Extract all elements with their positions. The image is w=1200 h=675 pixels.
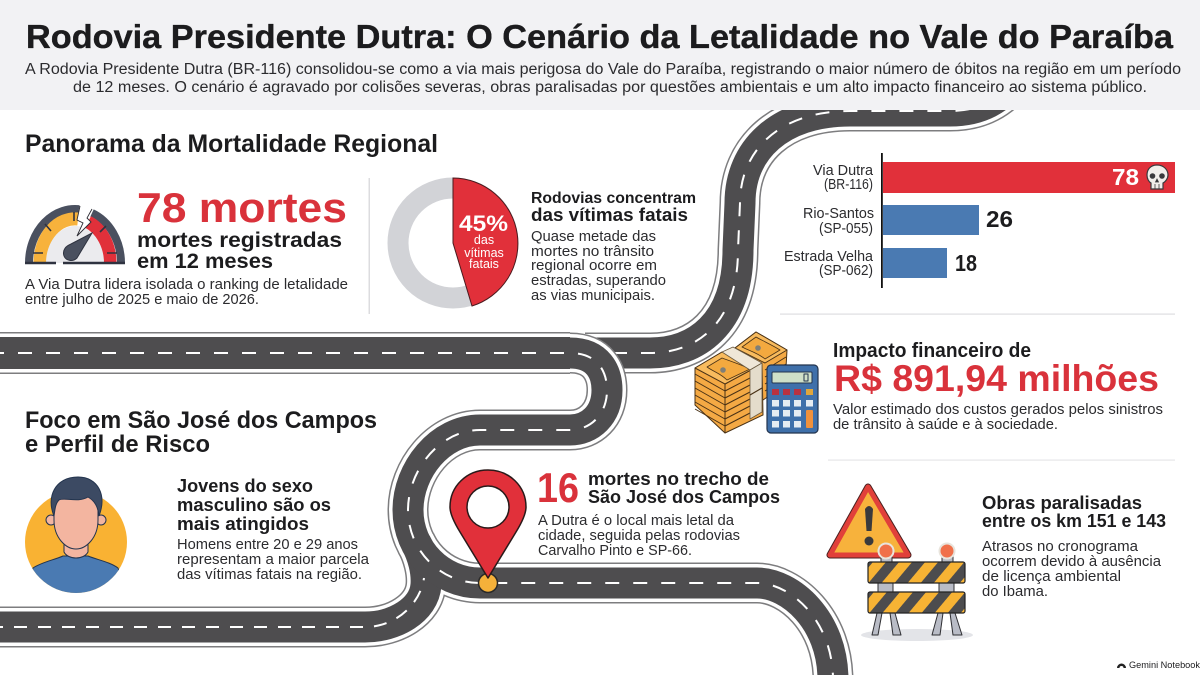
road network: [0, 75, 1020, 675]
text: roads concentrate victims: [531, 190, 696, 304]
description: cost: de trânsito à saúde e à sociedade.: [833, 416, 1058, 433]
panel: financial impact: [695, 332, 1163, 433]
text: roads concentrate victims: estradas, superando: [531, 272, 666, 289]
bar: Rio-Santos: 26: [986, 206, 1013, 232]
panel: regional mortality: [25, 130, 696, 314]
bar: Estrada Velha: Estrada Velha: [784, 249, 874, 265]
text: young men: Homens entre 20 e 29 anos: [177, 536, 358, 553]
description: stretch: [538, 512, 740, 559]
text: young men: Jovens do sexo: [177, 475, 313, 496]
title: Rodovia Presidente Dutra: O Cenário da Letalidade no Vale do Paraíba: [26, 18, 1174, 55]
text: roads concentrate victims: as vias municipais.: [531, 287, 655, 304]
heading: focus: [25, 407, 377, 458]
bar: Estrada Velha: (SP-062): [819, 263, 873, 279]
stat caption: [137, 228, 342, 273]
road: main winding route: [0, 353, 833, 675]
description: works: Atrasos no cronograma: [982, 538, 1139, 555]
stat caption: em 12 meses: [137, 249, 273, 273]
text: young men: representam a maior parcela: [177, 551, 370, 568]
heading: works: [982, 492, 1166, 531]
bar chart: deaths per highway: [784, 153, 1175, 288]
stat: 16 deaths: 16: [537, 464, 579, 511]
heading: panorama: Panorama da Mortalidade Regional: [25, 130, 438, 158]
donut chart: 45%: das: [474, 233, 494, 247]
subtitle: de 12 meses. O cenário é agravado por colisões severas, obras paralisadas por questões ambientais e um alto impacto financeiro ao sistema público.: [73, 79, 1147, 96]
stat caption: stretch: São José dos Campos: [588, 486, 780, 507]
donut chart: 45%: fatais: [469, 257, 499, 271]
text: roads concentrate victims: das vítimas fatais: [531, 204, 688, 225]
description: works: ocorrem devido à ausência: [982, 553, 1162, 570]
description: cost: [833, 401, 1163, 433]
stat: 78 deaths: 78 mortes: [137, 184, 347, 231]
stat caption: stretch: [588, 468, 780, 507]
bar: Estrada Velha: [784, 248, 977, 279]
description: works: de licença ambiental: [982, 568, 1121, 585]
description: stretch: cidade, seguida pelas rodovias: [538, 527, 740, 544]
icon: map pin: [450, 470, 526, 592]
heading: focus: Foco em São José dos Campos: [25, 407, 377, 434]
text: roads concentrate victims: mortes no trânsito: [531, 243, 654, 260]
road: upper right branch: [585, 75, 1020, 353]
text: young men: masculino são os: [177, 494, 331, 515]
icon: money stacks and calculator: [695, 332, 818, 433]
text: young men: [177, 475, 370, 583]
text: roads concentrate victims: regional ocorre em: [531, 257, 657, 274]
description: ranking: [25, 276, 348, 308]
subtitle: [25, 61, 1181, 96]
heading: works: entre os km 151 e 143: [982, 510, 1166, 531]
bar: Rio-Santos: Rio-Santos: [803, 206, 874, 222]
bar: Estrada Velha: 18: [955, 250, 977, 276]
text: roads concentrate victims: Rodovias concentram: [531, 190, 696, 207]
panel: São José dos Campos focus: [20, 407, 780, 600]
heading: focus: e Perfil de Risco: [25, 431, 210, 458]
text: young men: das vítimas fatais na região.: [177, 566, 362, 583]
icon: warning sign and barrier: [830, 487, 973, 641]
icon: broken speedometer: [25, 203, 125, 263]
description: works: [982, 538, 1162, 600]
donut chart: 45%: 45%: [459, 211, 508, 236]
bar: Via Dutra: Via Dutra: [813, 163, 874, 179]
subtitle: A Rodovia Presidente Dutra (BR-116) consolidou-se como a via mais perigosa do Vale do Paraíba, registrando o maior número de óbitos na região em um período: [25, 61, 1181, 78]
description: ranking: entre julho de 2025 e maio de 2026.: [25, 291, 259, 308]
panel: stalled works: [830, 487, 1166, 641]
description: cost: Valor estimado dos custos gerados pelos sinistros: [833, 401, 1163, 418]
bar: Via Dutra: 78: [1112, 164, 1139, 190]
bar: Via Dutra: [813, 162, 1175, 193]
bar: Via Dutra: (BR-116): [824, 177, 873, 193]
bar: Rio-Santos: (SP-055): [819, 221, 873, 237]
header band: [0, 0, 1200, 110]
donut chart: 45%: vítimas: [464, 246, 504, 260]
description: stretch: A Dutra é o local mais letal da: [538, 512, 735, 529]
stat caption: mortes registradas: [137, 228, 342, 252]
icon: young man avatar: [25, 476, 127, 593]
stat: R$ 891,94 million: R$ 891,94 milhões: [834, 358, 1159, 399]
text: roads concentrate victims: Quase metade das: [531, 228, 656, 245]
description: stretch: Carvalho Pinto e SP-66.: [538, 542, 692, 559]
heading: impact: Impacto financeiro de: [833, 340, 1031, 362]
bar: Rio-Santos: [803, 205, 1013, 237]
icon: skull: [1147, 165, 1168, 189]
donut chart: 45%: [398, 178, 518, 306]
text: young men: mais atingidos: [177, 513, 309, 534]
description: ranking: A Via Dutra lidera isolada o ranking de letalidade: [25, 276, 348, 293]
stat caption: stretch: mortes no trecho de: [588, 468, 769, 489]
description: works: do Ibama.: [982, 583, 1048, 600]
heading: works: Obras paralisadas: [982, 492, 1142, 513]
